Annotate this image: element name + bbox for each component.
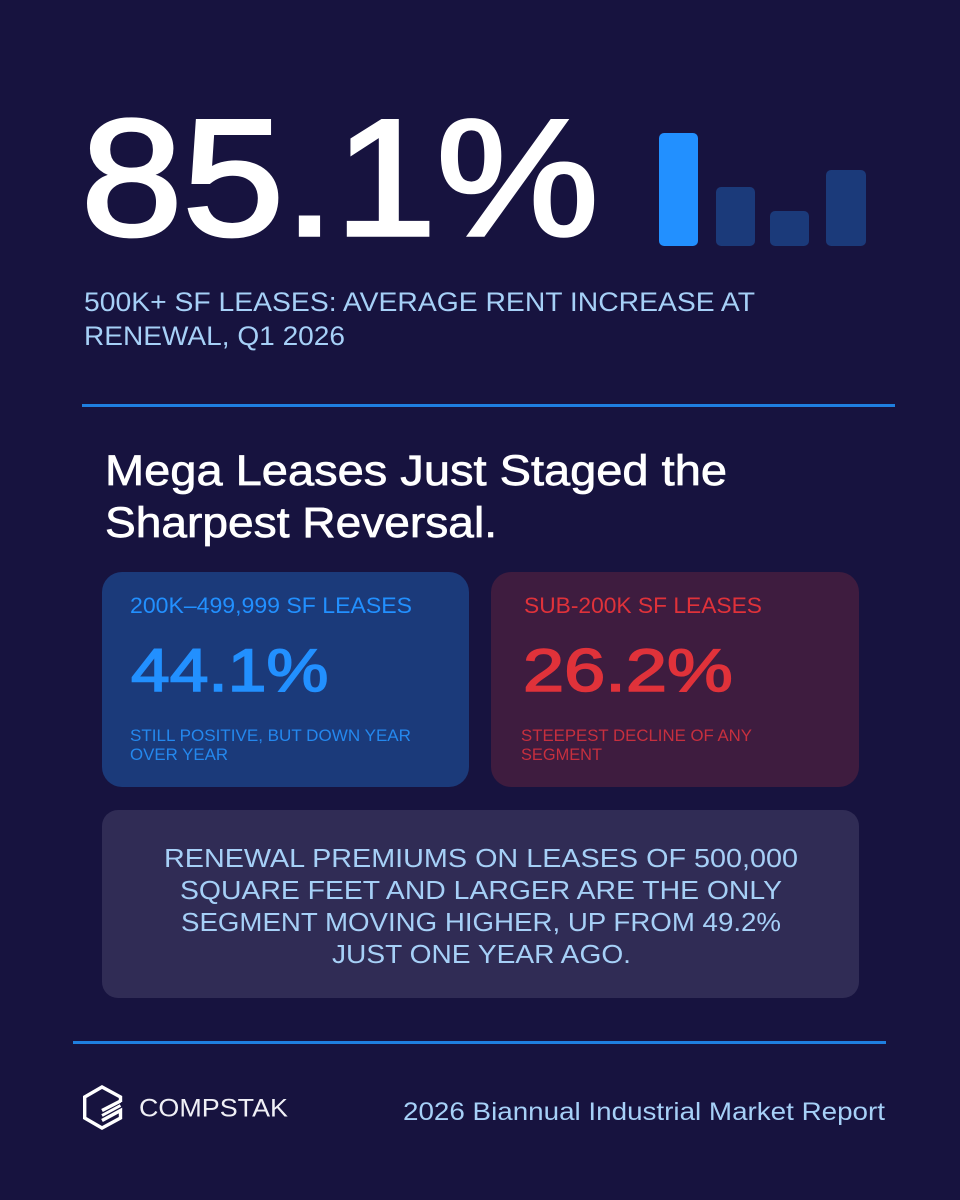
card note: STILL POSITIVE, BUT DOWN YEAR (130, 726, 411, 745)
heading: Sharpest Reversal. (105, 499, 497, 547)
card note (130, 726, 411, 764)
footer report title: 2026 Biannual Industrial Market Report (403, 1098, 885, 1126)
subtitle: RENEWAL, Q1 2026 (84, 321, 345, 351)
card label: 200K–499,999 SF LEASES (130, 593, 412, 618)
panel: 200K-499,999 SF leases (102, 572, 469, 787)
card note: STEEPEST DECLINE OF ANY (521, 726, 752, 745)
subtitle (84, 287, 755, 351)
panel: summary callout (102, 810, 859, 998)
callout text: JUST ONE YEAR AGO. (332, 939, 631, 969)
callout text (164, 843, 798, 969)
card note (521, 726, 752, 764)
subtitle: 500K+ SF LEASES: AVERAGE RENT INCREASE AT (84, 287, 755, 317)
bar chart icon (659, 133, 866, 246)
heading: Mega Leases Just Staged the (105, 447, 727, 495)
card statistic: 26.2% (523, 638, 733, 704)
card note: SEGMENT (521, 745, 602, 764)
logo wordmark: COMPSTAK (139, 1094, 288, 1122)
card label: SUB-200K SF LEASES (524, 593, 762, 618)
icon: CompStak logo (85, 1087, 120, 1128)
callout text: SQUARE FEET AND LARGER ARE THE ONLY (180, 875, 782, 905)
card statistic: 44.1% (131, 637, 328, 704)
card note: OVER YEAR (130, 745, 228, 764)
panel: sub-200K SF leases (491, 572, 859, 787)
headline statistic: 85.1% (81, 85, 599, 270)
callout text: SEGMENT MOVING HIGHER, UP FROM 49.2% (181, 907, 781, 937)
callout text: RENEWAL PREMIUMS ON LEASES OF 500,000 (164, 843, 798, 873)
heading (105, 447, 727, 547)
